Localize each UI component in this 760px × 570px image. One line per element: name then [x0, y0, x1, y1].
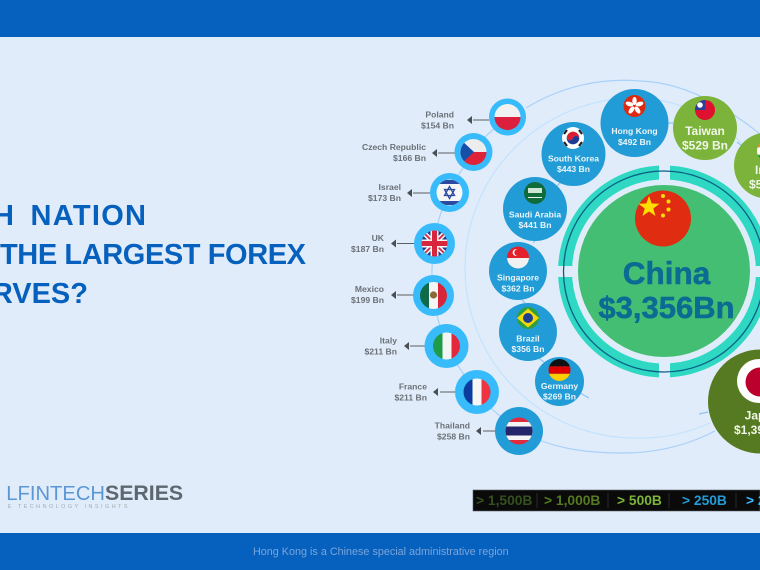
country: Mexico: $199 Bn: [351, 295, 384, 305]
country: Thailand: $258 Bn: [437, 432, 470, 442]
legend items: > 1,500B: [476, 493, 532, 508]
country: Mexico: [351, 275, 454, 316]
title: THE LARGEST FOREX: [0, 239, 307, 271]
logo: global fintech series: LFINTECH: [6, 483, 105, 505]
country: Thailand: [435, 407, 543, 455]
bubble: Japan: [708, 350, 760, 454]
legend items: > 1,000B: [544, 493, 600, 508]
bubble: Brazil: $356 Bn: [512, 344, 544, 354]
bubble: Singapore: $362 Bn: [502, 284, 534, 294]
panel: China bubble: [553, 160, 760, 383]
legend items: > 250B: [682, 493, 727, 508]
bubble: Taiwan: $529 Bn: [682, 138, 728, 152]
bubble: Singapore: Singapore: [497, 272, 539, 282]
country: Czech Republic: Czech Republic: [362, 142, 426, 152]
bubble: Brazil: [499, 303, 557, 361]
bubble: Saudi Arabia: $441 Bn: [519, 220, 551, 230]
bubble: South Korea: South Korea: [548, 154, 599, 164]
legend items: > 500B: [617, 493, 662, 508]
country: Italy: Italy: [380, 336, 397, 346]
china ring: [553, 160, 760, 383]
connector arcs: [432, 80, 760, 453]
bubble: Hong Kong: Hong Kong: [611, 126, 658, 136]
country: Italy: [364, 324, 468, 368]
bubble: Germany: $269 Bn: [543, 392, 576, 402]
bubble: Taiwan: Taiwan: [685, 124, 725, 138]
country: Israel: Israel: [379, 182, 401, 192]
footer band with note: Hong Kong is a Chinese special administrative region: [253, 546, 509, 558]
country: Poland: Poland: [425, 110, 454, 120]
bubble: South Korea: [542, 122, 606, 186]
country: Mexico: Mexico: [355, 284, 384, 294]
country: UK: [351, 223, 455, 264]
china label: China: [623, 255, 711, 291]
title: [0, 200, 307, 310]
bubble: Saudi Arabia: Saudi Arabia: [509, 210, 561, 220]
bubble: Germany: [535, 357, 584, 406]
country: France: [394, 370, 499, 414]
legend items: [476, 493, 760, 508]
china circle: [578, 185, 750, 357]
bubble: Taiwan: [673, 96, 737, 160]
bubble: Germany: Germany: [541, 381, 578, 391]
header band: [0, 0, 760, 37]
bubble: Saudi Arabia: [503, 177, 567, 241]
country: Italy: $211 Bn: [364, 346, 397, 356]
country: France: France: [399, 382, 427, 392]
bubble: Hong Kong: $492 Bn: [618, 137, 651, 147]
icon: China flag: [635, 190, 691, 246]
bubble: Brazil: Brazil: [516, 334, 540, 344]
footer band with note: [0, 533, 760, 570]
legend bar: [473, 490, 760, 511]
bubble: South Korea: $443 Bn: [557, 164, 590, 174]
country: Czech Republic: [362, 133, 492, 171]
country: Israel: [368, 173, 469, 212]
title: NATION: [30, 200, 146, 232]
country: Israel: $173 Bn: [368, 193, 401, 203]
logo: global fintech series: E TECHNOLOGY INSIGHTS: [8, 504, 130, 510]
country: Thailand: Thailand: [435, 420, 470, 430]
logo: global fintech series: [6, 481, 183, 510]
country: UK: UK: [372, 233, 385, 243]
china label: $3,356Bn: [598, 290, 735, 325]
country: Poland: [421, 98, 526, 136]
china label: [598, 255, 735, 325]
country: Czech Republic: $166 Bn: [393, 153, 426, 163]
country: UK: $187 Bn: [351, 244, 384, 254]
bubble: India: [734, 132, 760, 198]
country: Poland: $154 Bn: [421, 120, 454, 130]
bubble: Hong Kong: [600, 89, 668, 157]
bubble: Singapore: [489, 242, 547, 300]
logo: global fintech series: SERIES: [105, 481, 183, 505]
country: France: $211 Bn: [394, 392, 427, 402]
